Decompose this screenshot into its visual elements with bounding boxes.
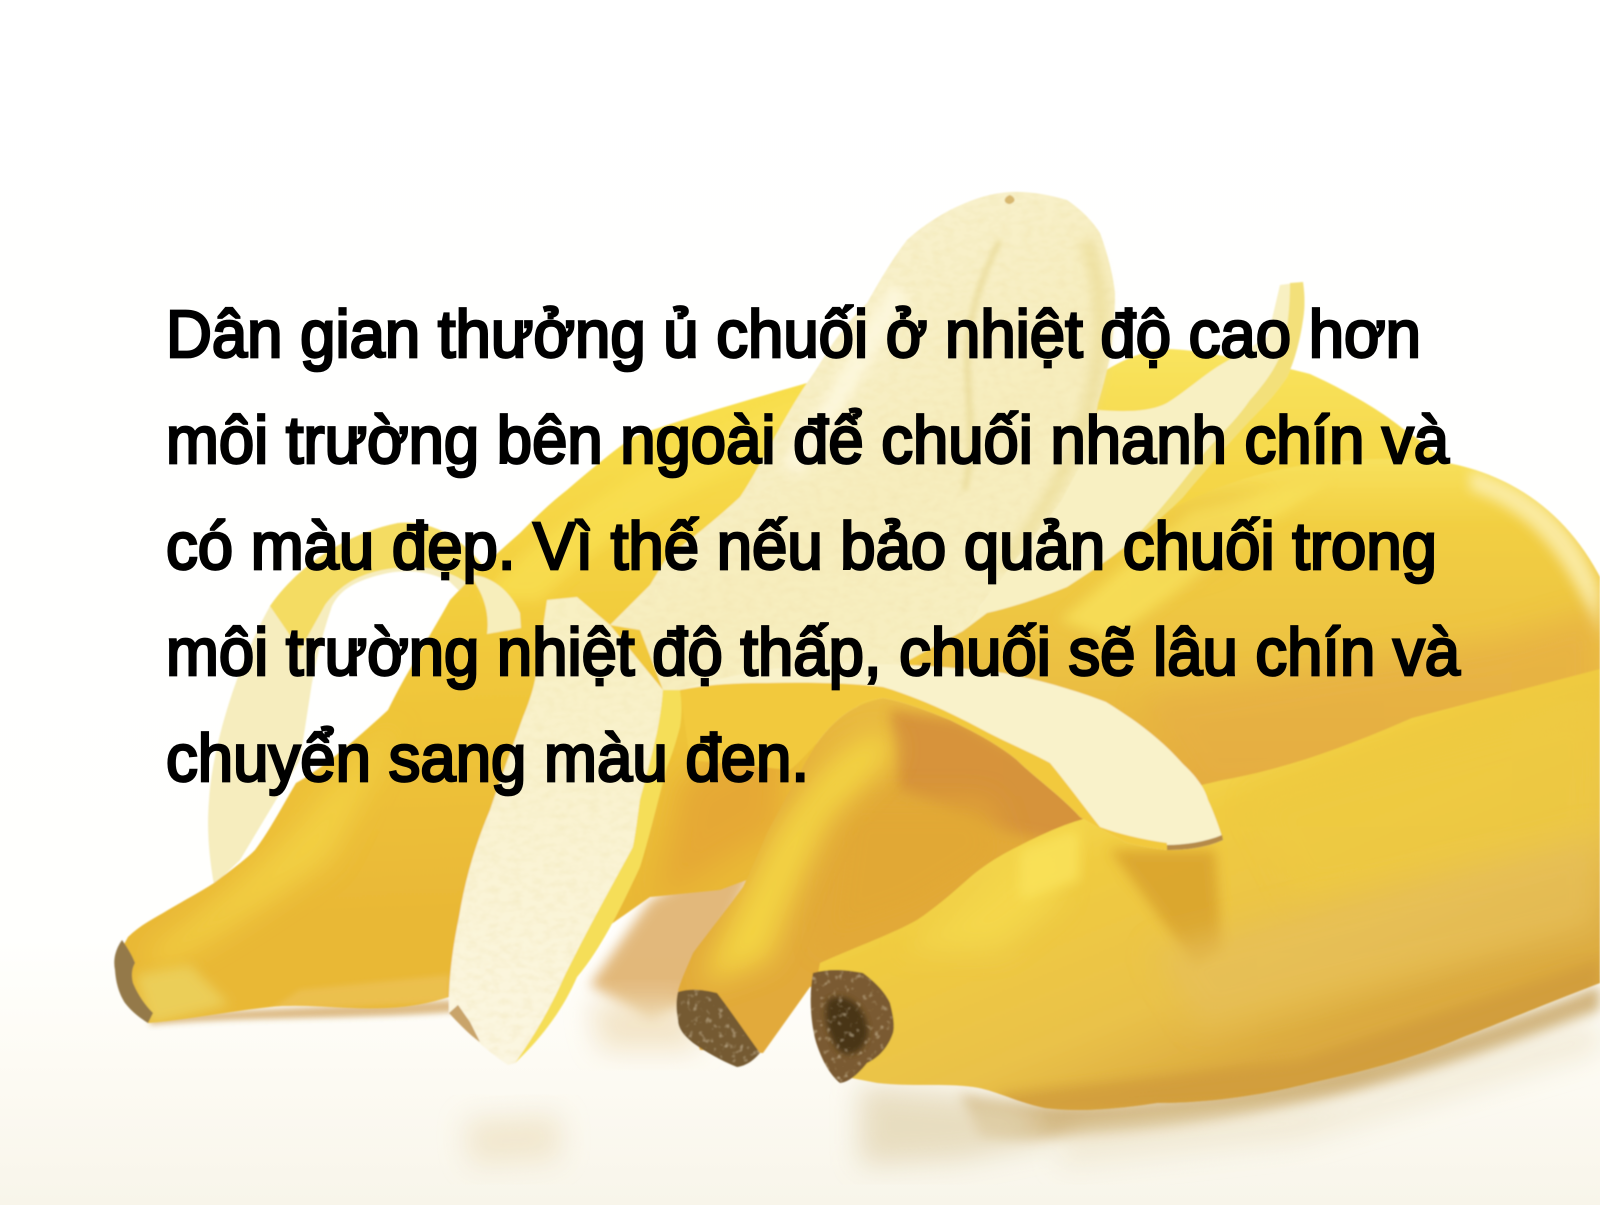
banana photo illustration — [114, 192, 1600, 1165]
front banana stem end — [811, 970, 894, 1083]
main text block: Dân gian thưởng ủ chuối ở nhiệt độ cao hơn — [166, 298, 1421, 372]
flesh mottled texture — [610, 192, 1115, 690]
bottom peel flap — [680, 663, 1223, 850]
main text block: môi trường bên ngoài để chuối nhanh chín và — [166, 404, 1449, 478]
main text block: có màu đẹp. Vì thế nếu bảo quản chuối trong — [166, 510, 1437, 584]
left banana — [114, 383, 960, 1025]
peeled banana flesh — [610, 192, 1115, 690]
main text block: chuyển sang màu đen. — [166, 722, 809, 796]
large middle banana — [676, 459, 1600, 1067]
main text block: môi trường nhiệt độ thấp, chuối sẽ lâu chín và — [166, 616, 1460, 690]
left banana stem end — [114, 940, 153, 1023]
peel loop behind left banana — [208, 523, 520, 885]
flesh ridges — [790, 195, 1101, 570]
left hanging peel strip — [449, 597, 682, 1065]
main text block — [166, 298, 1460, 796]
front banana — [811, 669, 1600, 1120]
cast shadows on table — [150, 830, 1600, 1165]
right peel strip — [963, 282, 1304, 631]
peel loop end over left banana — [470, 575, 521, 634]
middle banana stem end — [676, 990, 760, 1067]
back banana, top right — [1080, 349, 1453, 560]
